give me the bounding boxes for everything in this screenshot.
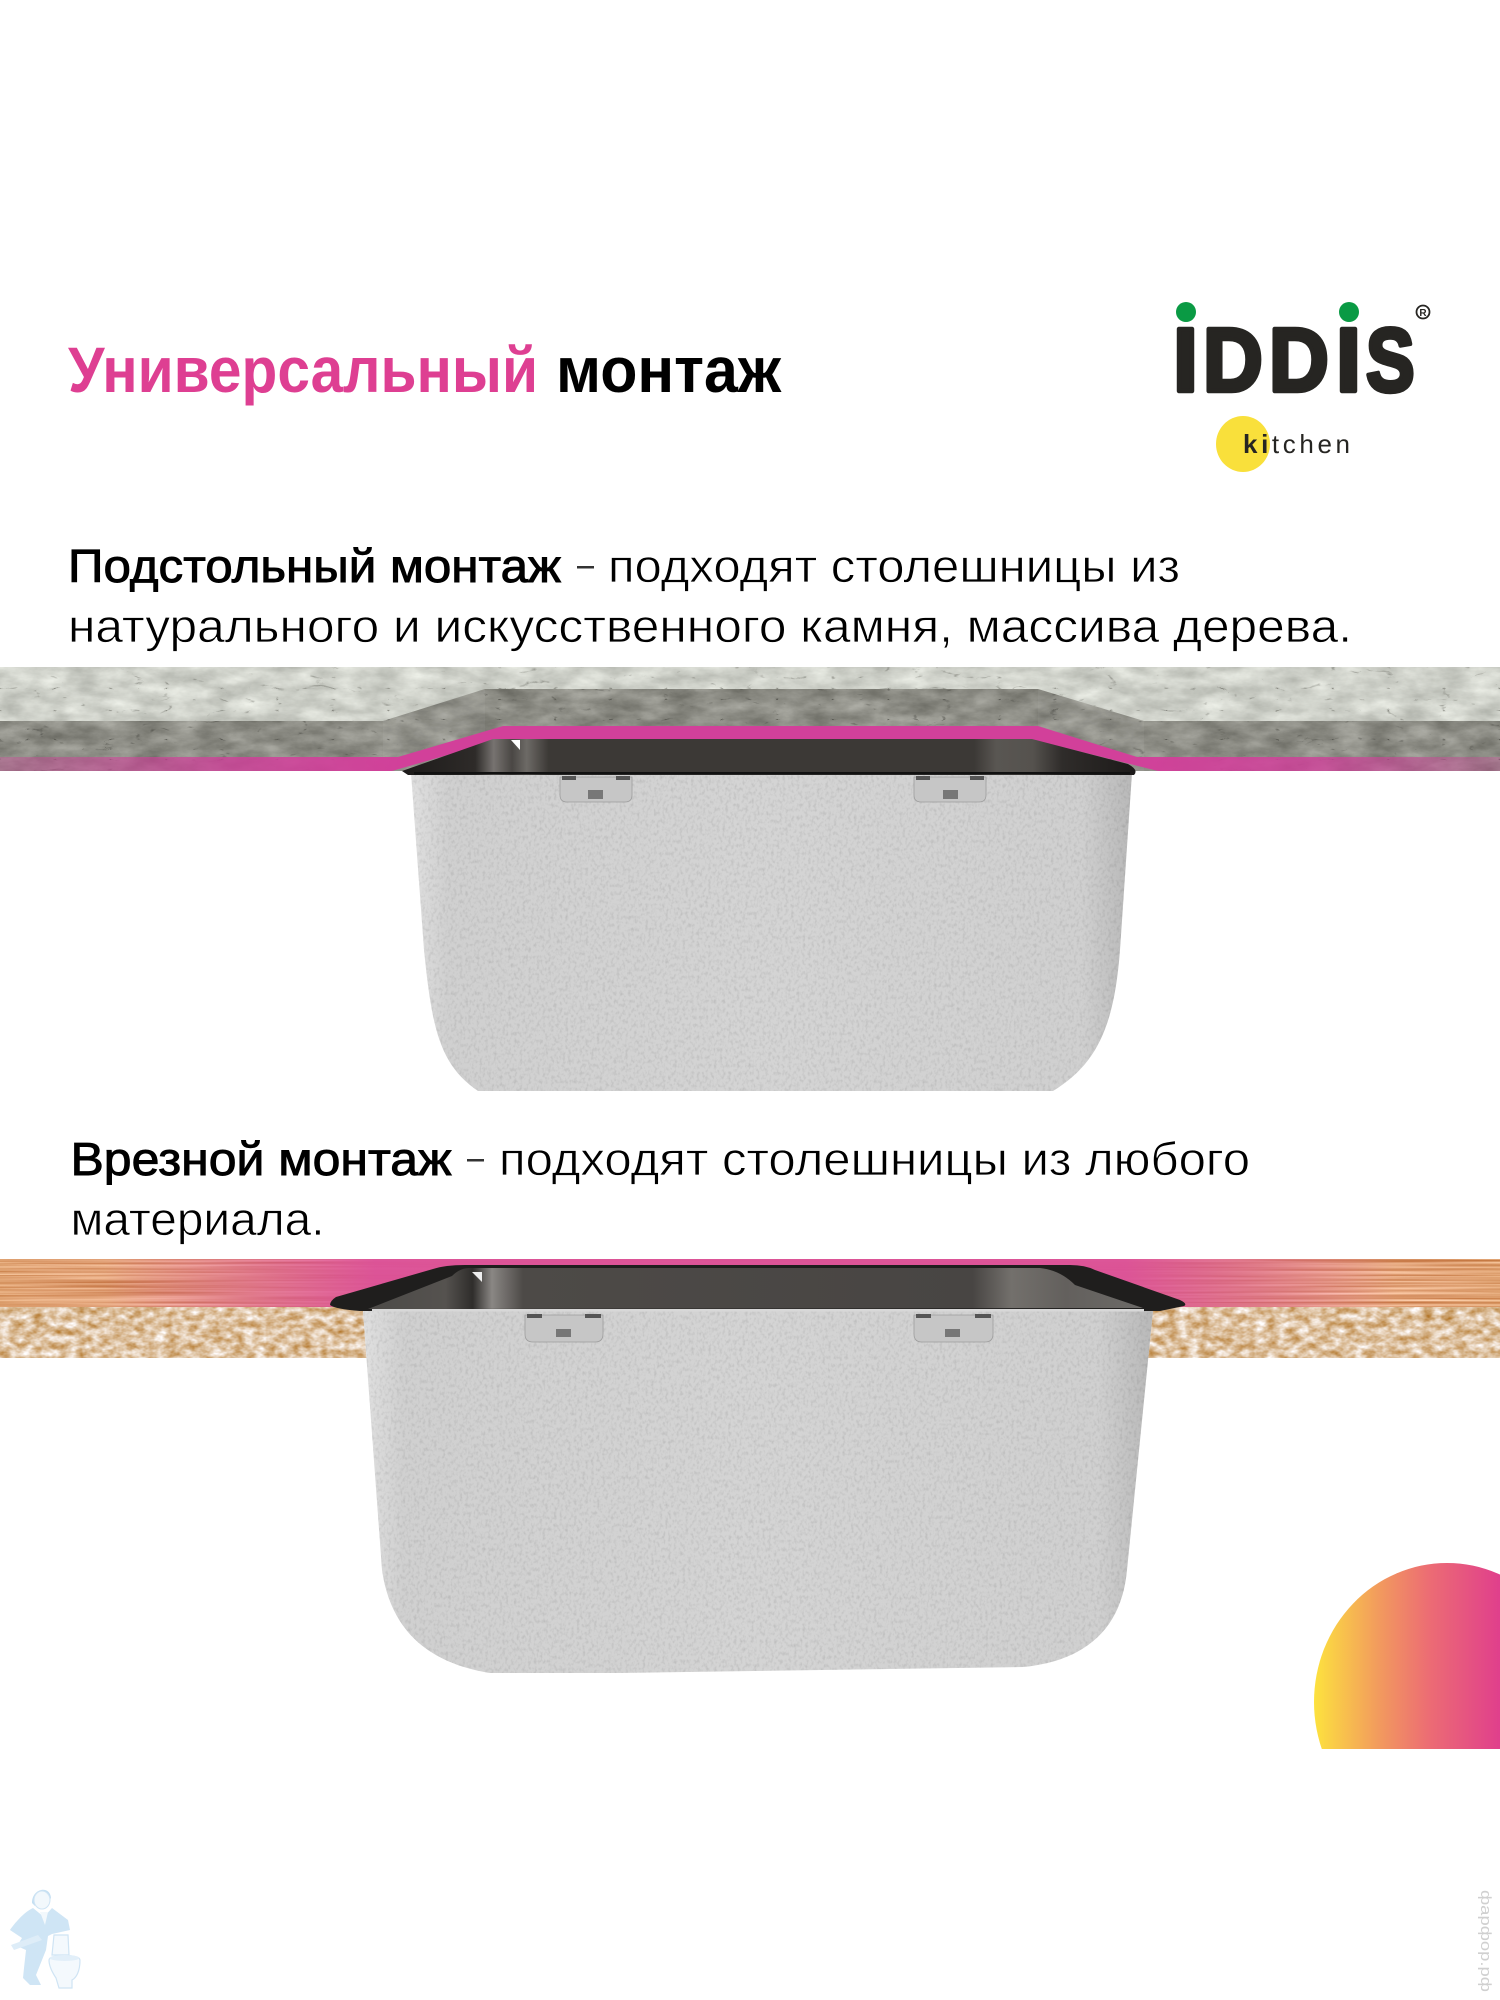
text block: undermount [68,540,1352,652]
clip: left [525,1314,603,1342]
watermark text: фарфор.рф [1477,1890,1494,1992]
logo: iddis kitchen: D [1203,311,1263,411]
clip: right [914,776,986,802]
logo: iddis kitchen: D [1269,311,1329,411]
logo: iddis kitchen: I [1336,311,1361,411]
logo: iddis kitchen [1173,302,1430,472]
logo: iddis kitchen: I [1173,311,1198,411]
logo: iddis kitchen: kitchen [1243,429,1350,459]
panel: stone countertop [0,667,1500,771]
text block: undermount: Подстольный монтаж [68,540,561,592]
logo: iddis kitchen: S [1366,311,1415,411]
decorative gradient circle [1314,1563,1500,1749]
title: монтаж [556,334,782,406]
clip: left [560,776,632,802]
text block: undermount: натурального и искусственного камня, массива дерева. [68,600,1352,652]
icon: plumber watermark [10,1890,80,1988]
sink rim and interior: drop-in [330,1265,1185,1312]
text block: undermount: подходят столешницы из [608,540,1180,592]
logo: iddis kitchen: R [1419,308,1427,319]
clip: right [914,1314,993,1342]
sink: drop-in [330,1265,1185,1673]
text block: drop-in: материала. [70,1193,324,1245]
panel: wood and chipboard countertop [0,1259,1500,1358]
sink interior: undermount [402,739,1136,775]
text block: drop-in: Врезной монтаж [70,1133,452,1185]
sink: undermount [402,739,1136,1091]
text block: drop-in [70,1133,1250,1245]
title: Универсальный [68,334,538,406]
text block: drop-in: подходят столешницы из любого [499,1133,1250,1185]
pink mounting band: undermount [0,726,1500,771]
